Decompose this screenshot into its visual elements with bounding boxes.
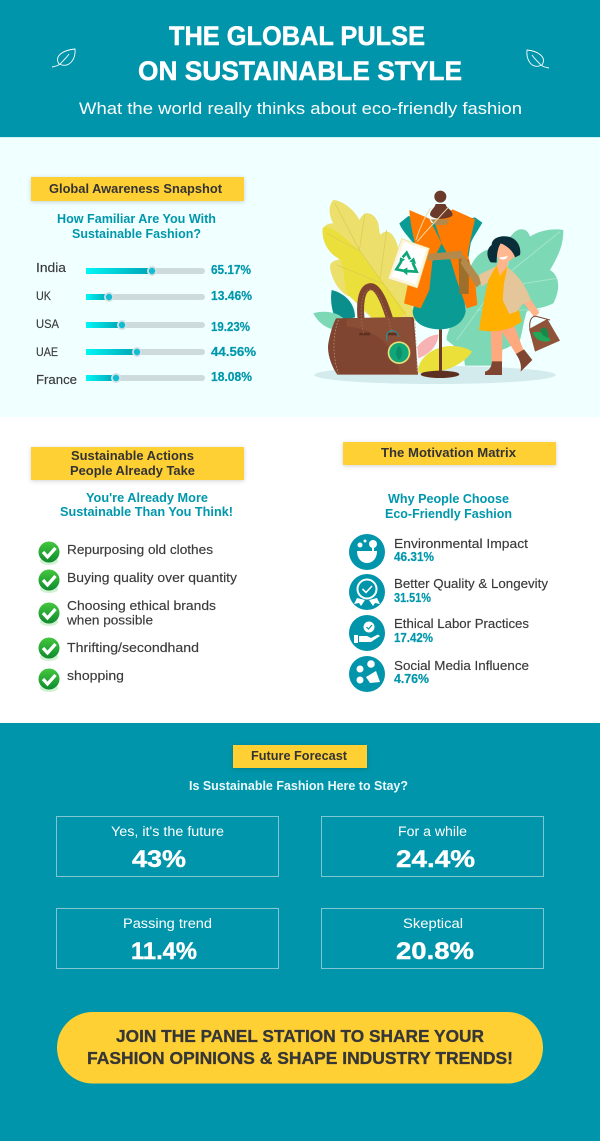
woman: [479, 236, 539, 375]
yellow leaf left: [323, 200, 415, 327]
title: THE GLOBAL PULSE: [169, 21, 425, 51]
row: France: France: [36, 372, 77, 387]
row: France: 18.08%: [211, 370, 252, 384]
stat box: passing trend: 11.4%: [131, 938, 197, 965]
row: USA: USA: [36, 317, 59, 331]
item: ethical brands: when possible: [66, 612, 153, 628]
dress: [399, 209, 483, 329]
item: ethical brands: [38, 598, 217, 628]
row: USA: [36, 317, 250, 334]
mannequin stand: [421, 329, 459, 378]
stat box: yes, it's the future: 43%: [132, 846, 186, 873]
row: USA: 19.23%: [211, 320, 250, 334]
item: quality: Buying quality over quantity: [67, 570, 238, 585]
handbag: [328, 287, 418, 375]
row: India: 65.17%: [211, 263, 251, 277]
panel: white middle section: [0, 417, 600, 723]
stat box: yes, it's the future: Yes, it's the future: [111, 824, 224, 839]
panel: future forecast: [0, 723, 600, 1141]
heading tag: motivation matrix: The Motivation Matrix: [381, 446, 516, 460]
subheading: already more sustainable: [60, 491, 233, 519]
panel: global awareness snapshot: [0, 137, 600, 417]
item: thrifting: Thrifting/secondhand: [67, 640, 199, 655]
subheading: already more sustainable: Sustainable Than You Think!: [60, 505, 233, 519]
stat box: for a while: [322, 816, 544, 876]
subheading: why people choose: [385, 492, 512, 521]
motivation: social media: Social Media Influence: [394, 658, 529, 673]
motivation: ethical labor: Ethical Labor Practices: [394, 616, 530, 631]
motivation: social media: 4.76%: [394, 672, 429, 686]
row: UK: UK: [36, 289, 51, 303]
shopping bag: [529, 316, 560, 352]
subheading: already more sustainable: You're Already More: [86, 491, 208, 505]
heading tag: global awareness snapshot: Global Awareness Snapshot: [49, 182, 223, 196]
item: shopping: [38, 668, 124, 692]
stat box: for a while: For a while: [398, 824, 467, 839]
heading tag: global awareness snapshot: [31, 177, 244, 201]
hang tag with recycling symbol: [388, 207, 448, 288]
small teal and mint leaves: [331, 290, 355, 322]
call to action: [57, 1012, 543, 1084]
pink and yellow foreground leaves: [417, 334, 438, 358]
subheading: how familiar: How Familiar Are You With: [57, 212, 216, 226]
stat box: skeptical: [322, 908, 544, 968]
mannequin neck and knob: [430, 191, 453, 225]
heading tag: sustainable actions: Sustainable Actions: [71, 449, 194, 463]
call to action: JOIN THE PANEL STATION TO SHARE YOUR: [116, 1026, 484, 1046]
row: France: [36, 370, 252, 387]
stat box: for a while: 24.4%: [396, 846, 475, 873]
item: repurposing: Repurposing old clothes: [67, 542, 214, 557]
icon: left leaf: [52, 49, 75, 67]
motivation: ethical labor: 17.42%: [394, 631, 433, 645]
panel: sustainable actions: [31, 447, 244, 692]
motivation: environmental impact: 46.31%: [394, 550, 434, 564]
title: [138, 21, 462, 86]
heading tag: sustainable actions: [31, 447, 244, 480]
slider chart: familiarity by country: [36, 260, 256, 387]
motivation: better quality: 31.51%: [394, 591, 431, 605]
stat box: passing trend: [56, 908, 278, 968]
stat box: skeptical: Skeptical: [403, 916, 463, 931]
stat box: skeptical: 20.8%: [396, 938, 474, 965]
row: India: India: [36, 260, 67, 275]
subheading: here to stay: Is Sustainable Fashion Here to Stay?: [189, 779, 408, 793]
item: thrifting: [38, 638, 199, 661]
item: quality: [38, 570, 238, 593]
item: ethical brands: Choosing ethical brands: [67, 598, 217, 613]
panel: header: [0, 0, 600, 137]
stat box: passing trend: Passing trend: [123, 916, 212, 931]
call to action: FASHION OPINIONS & SHAPE INDUSTRY TRENDS!: [87, 1048, 513, 1068]
motivation: environmental impact: Environmental Impact: [394, 536, 528, 551]
motivation: better quality: Better Quality & Longevity: [394, 576, 548, 591]
subheading: how familiar: [57, 212, 216, 241]
row: UK: 13.46%: [211, 289, 252, 303]
heading tag: motivation matrix: [343, 442, 556, 465]
item: repurposing: [38, 542, 214, 565]
subheading: how familiar: Sustainable Fashion?: [72, 227, 201, 241]
title: ON SUSTAINABLE STYLE: [138, 56, 462, 86]
row: UAE: 44.56%: [211, 345, 256, 359]
motivation: better quality: [349, 574, 548, 610]
heading tag: future forecast: Future Forecast: [251, 749, 348, 763]
panel: motivation matrix: [343, 442, 556, 692]
illustration: woman with mannequin, leaves and bag: [313, 191, 563, 384]
item: shopping: shopping: [67, 668, 124, 683]
row: UAE: [36, 345, 256, 359]
subheading: why people choose: Eco-Friendly Fashion: [385, 507, 512, 521]
icon: right leaf: [527, 50, 549, 68]
green leaf right: [447, 229, 563, 366]
subheading: why people choose: Why People Choose: [388, 492, 509, 506]
motivation: ethical labor: [349, 615, 530, 651]
row: India: [36, 260, 251, 277]
row: UK: [36, 289, 252, 303]
heading tag: sustainable actions: People Already Take: [70, 464, 195, 478]
stat box: yes, it's the future: [56, 816, 278, 876]
subtitle: What the world really thinks about eco-friendly fashion: [79, 100, 522, 118]
checklist: [38, 542, 238, 692]
motivation: environmental impact: [349, 534, 528, 570]
row: UAE: UAE: [36, 345, 58, 359]
motivation: social media: [349, 656, 529, 692]
heading tag: future forecast: [233, 745, 367, 768]
